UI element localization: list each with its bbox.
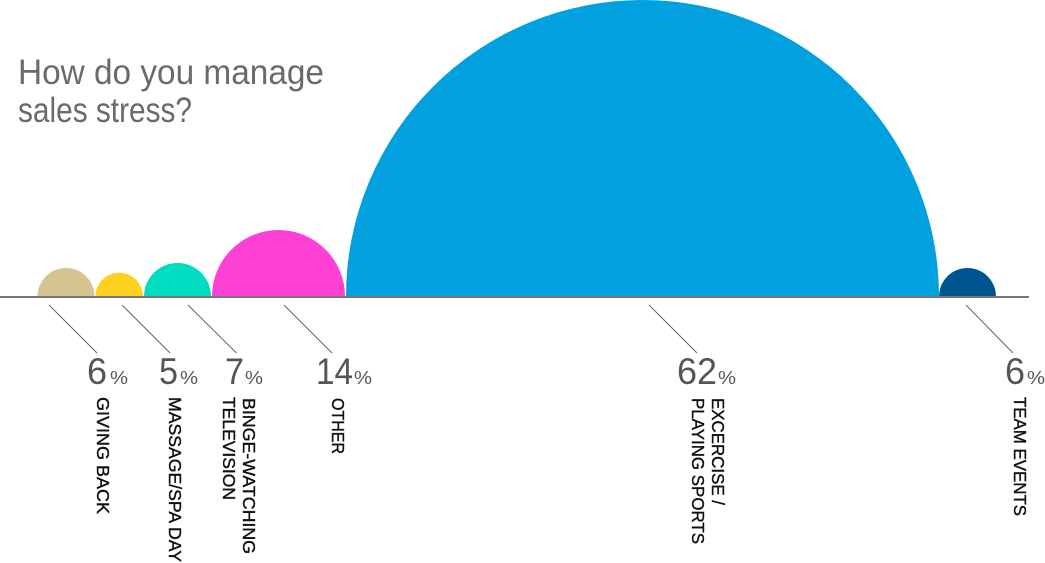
semicircle: other [212, 230, 345, 296]
semicircle chart [0, 0, 1029, 298]
value: 7%: 7 [225, 351, 244, 392]
item: team events [966, 305, 1045, 516]
leader line: binge-watching television [188, 305, 236, 353]
title: How do you manage [18, 53, 324, 92]
leader line: exercise / playing sports [649, 305, 697, 353]
label: team events: TEAM EVENTS [1010, 397, 1030, 516]
label: massage/spa day: MASSAGE/SPA DAY [165, 397, 185, 562]
semicircle: exercise / playing sports [346, 0, 939, 296]
leader line: team events [966, 305, 1013, 353]
value: 7%: % [245, 368, 263, 388]
value: 6%: % [1027, 368, 1045, 388]
item: other [284, 305, 372, 454]
label: other: OTHER [328, 398, 348, 454]
value: 6%: 6 [87, 351, 107, 392]
value: 6%: % [110, 368, 128, 388]
label: exercise / playing sports: PLAYING SPORTS [688, 398, 708, 544]
value: 6% [1005, 351, 1045, 392]
value: 62% [677, 351, 736, 392]
item: giving back [49, 305, 128, 514]
value: 5%: 5 [159, 351, 178, 392]
value: 5%: % [180, 368, 198, 388]
title: sales stress? [18, 91, 192, 130]
value: 14%: % [354, 368, 372, 388]
label: binge-watching television [219, 397, 259, 554]
baseline axis [0, 296, 1029, 298]
value: 5% [159, 351, 198, 392]
semicircle: binge-watching television [144, 263, 211, 296]
semicircle: massage/spa day [96, 273, 143, 296]
item: exercise / playing sports [649, 305, 736, 544]
leader line: massage/spa day [122, 305, 170, 353]
semicircle: giving back [38, 268, 94, 296]
label: giving back: GIVING BACK [93, 397, 113, 514]
label: exercise / playing sports: EXCERCISE / [708, 398, 728, 505]
value: 14%: 14 [316, 351, 353, 392]
item: massage/spa day [122, 305, 198, 562]
label: binge-watching television: BINGE-WATCHING [239, 398, 259, 554]
title [18, 53, 324, 130]
value: 6% [87, 351, 128, 392]
value: 7% [225, 351, 263, 392]
label: binge-watching television: TELEVISION [219, 397, 239, 500]
label: exercise / playing sports [688, 398, 728, 544]
leader line: other [284, 305, 332, 353]
value: 62%: 62 [677, 351, 717, 392]
item: binge-watching television [188, 305, 263, 554]
semicircle: team events [939, 268, 996, 296]
value: 6%: 6 [1005, 351, 1025, 392]
value: 62%: % [718, 368, 736, 388]
leader line: giving back [49, 305, 97, 353]
